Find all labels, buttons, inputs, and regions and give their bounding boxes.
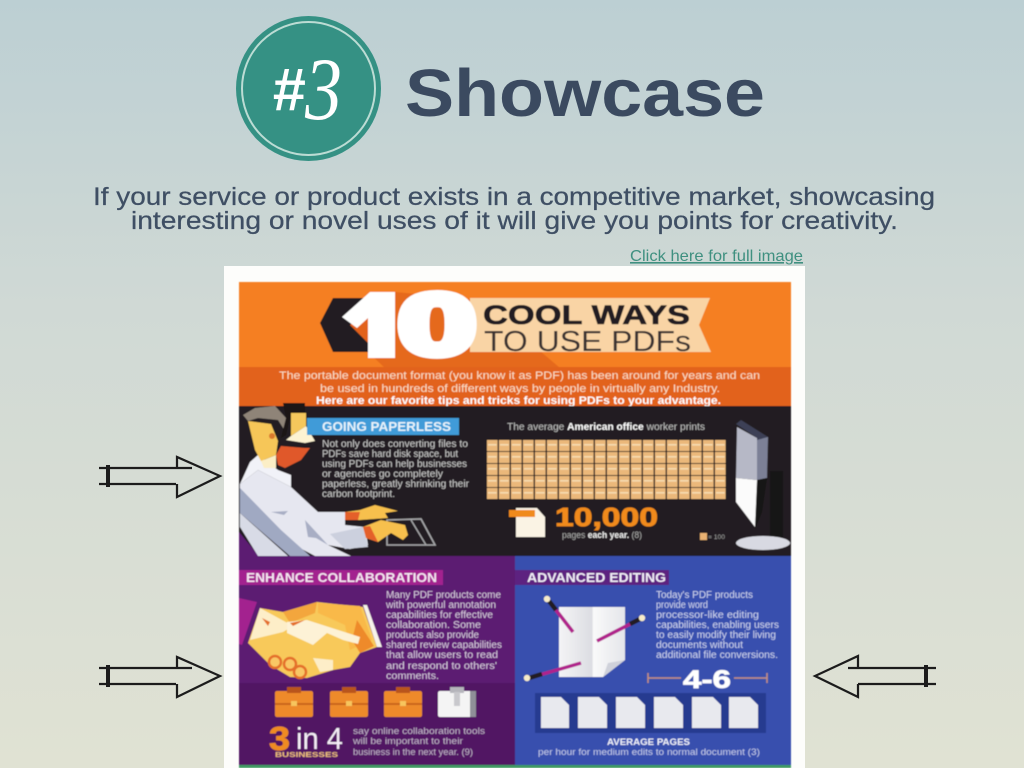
text: collaboration: that allow users to read <box>386 650 498 661</box>
headline: 10 cool ways: COOL WAYS <box>483 300 690 330</box>
text: online collaboration tools: will be important to their <box>352 736 463 747</box>
arrow: top left <box>99 457 220 497</box>
arrow: bottom right <box>815 656 936 697</box>
text: collaboration <box>385 590 502 682</box>
chart: six document icons <box>535 693 766 733</box>
text: advanced editing: capabilities, enabling users <box>656 620 779 631</box>
text: going paperless: Not only does converting files to <box>322 439 468 450</box>
stat: 10,000 pages: pages each year. (8) <box>562 530 642 540</box>
stat: 3 in 4 businesses: BUSINESSES <box>275 750 338 759</box>
text: advanced editing: provide word <box>656 600 708 611</box>
text: collaboration: products also provide <box>386 630 479 641</box>
stat: 4-6 with range bracket <box>648 666 767 694</box>
icon: monitor <box>736 420 790 550</box>
subtitle: If your service or product exists in a competitive market, showcasing <box>93 183 935 211</box>
caption: average pages: AVERAGE PAGES <box>607 737 690 748</box>
panel: advanced editing <box>515 556 791 765</box>
legend: page equals 100: = 100 <box>708 535 726 541</box>
panel: orange header <box>239 274 791 407</box>
stat: 3 in 4 businesses <box>269 720 343 759</box>
illustration: document and pens <box>524 596 645 681</box>
title: Showcase <box>405 56 765 131</box>
text: collaboration: Many PDF products come <box>386 590 501 601</box>
legend: page equals 100 <box>700 533 726 541</box>
text: advanced editing: Today's PDF products <box>656 590 753 601</box>
text: collaboration: comments. <box>386 671 439 682</box>
stat: 10,000 pages: 10,000 <box>555 502 658 532</box>
badge: #3: 3 <box>304 41 342 139</box>
panel: enhance collaboration <box>239 556 515 765</box>
panel: going paperless <box>239 403 791 556</box>
headline: 10 cool ways: TO USE PDFs <box>484 326 691 358</box>
text: advanced editing: to easily modify their living <box>656 630 776 641</box>
illustration: handshake <box>248 602 382 678</box>
text: going paperless: carbon footprint. <box>322 489 395 500</box>
arrow: bottom left <box>99 657 220 697</box>
text: going paperless <box>322 439 470 500</box>
stat: 3 in 4 businesses: in 4 <box>296 721 343 756</box>
text: advanced editing: documents without <box>656 640 743 651</box>
label: advanced editing: ADVANCED EDITING <box>527 571 666 585</box>
text: collaboration: and respond to others' <box>386 661 497 672</box>
headline: 10 cool ways: 1 <box>369 274 394 376</box>
subtitle: interesting or novel uses of it will give you points for creativity. <box>131 207 898 235</box>
text: collaboration: capabilities for effective <box>386 610 493 621</box>
text: advanced editing: processor-like editing <box>656 610 759 621</box>
intro text: Here are our favorite tips and tricks for using PDFs to your advantage. <box>316 395 721 407</box>
text: going paperless: using PDFs can help businesses <box>322 459 467 470</box>
infographic: 10 cool ways to use PDFs <box>239 274 791 768</box>
text: advanced editing: additional file conversions. <box>656 650 778 661</box>
subtitle <box>93 183 935 235</box>
green strip <box>239 765 791 768</box>
intro text <box>279 370 760 407</box>
text: average American office worker: The average American office worker prints <box>507 422 705 433</box>
text: online collaboration tools: say online collaboration tools <box>353 726 485 737</box>
text: going paperless: paperless, greatly shrinking their <box>322 479 470 490</box>
text: collaboration: with powerful annotation <box>385 600 496 611</box>
link: full image: Click here for full image <box>630 248 803 265</box>
chart: page pictogram grid <box>487 440 727 500</box>
headline: 10 cool ways: 0 <box>398 277 476 373</box>
text: online collaboration tools: business in the next year. (9) <box>353 747 473 758</box>
badge: #3: # <box>272 56 306 123</box>
icon: large page <box>509 508 545 537</box>
icons: briefcases 3 of 4 <box>275 687 476 717</box>
headline: 10 cool ways <box>320 274 711 376</box>
stat: 10,000 pages <box>555 502 658 540</box>
label: enhance collaboration: ENHANCE COLLABORATION <box>246 571 437 585</box>
illustration: man at keyboard <box>239 403 435 556</box>
badge: #3 <box>236 16 381 161</box>
stat: 3 in 4 businesses: 3 <box>269 720 290 757</box>
label: going paperless: GOING PAPERLESS <box>322 419 451 434</box>
text: online collaboration tools <box>352 726 485 758</box>
intro text: be used in hundreds of different ways by people in virtually any Industry. <box>320 383 720 395</box>
intro text: The portable document format (you know it as PDF) has been around for years and can <box>279 370 760 382</box>
stat: 4-6 with range bracket: 4-6 <box>683 666 731 694</box>
text: going paperless: PDFs save hard disk space, but <box>322 449 458 460</box>
caption: average pages: per hour for medium edits to normal document (3) <box>538 747 760 758</box>
text: going paperless: or agencies go completely <box>322 469 443 480</box>
text: collaboration: shared review capabilities <box>386 640 502 651</box>
text: advanced editing <box>656 590 779 661</box>
text: collaboration: collaboration. Some <box>386 620 481 631</box>
caption: average pages <box>538 737 760 758</box>
infographic frame <box>224 266 805 768</box>
